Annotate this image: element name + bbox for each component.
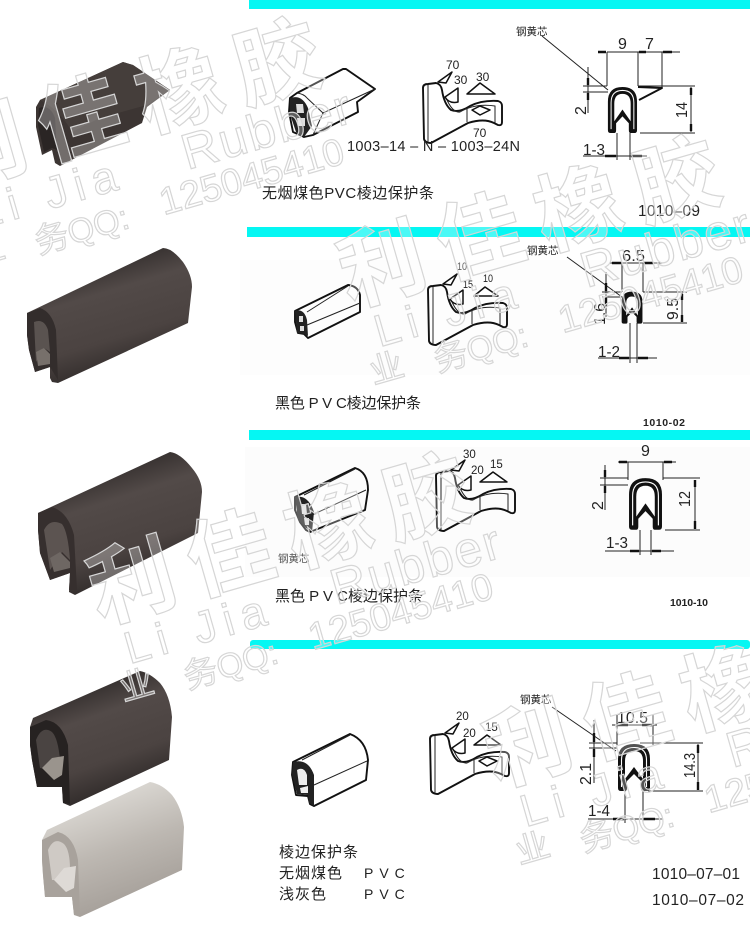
icon: angled section drawing 2: 15: [463, 279, 473, 291]
watermark 2: 利佳橡胶: [328, 120, 746, 324]
product names 4: 浅灰色: [279, 886, 327, 903]
watermark 3: 利佳橡胶: [78, 437, 496, 641]
icon: angled section drawing 1: 70: [446, 58, 460, 72]
cross-section drawing 1010-07: [552, 707, 703, 823]
panel 1: smoke-free charcoal PVC trim: [262, 25, 700, 220]
product photo 1: dark flanged edge trim: [36, 62, 170, 166]
icon: angled section drawing 2: 10: [483, 273, 493, 285]
watermark 3: 125045410: [304, 566, 498, 659]
icon: angled section drawing 2: 10: [457, 261, 467, 273]
cross-section drawing 1010-07: 1-4: [588, 803, 610, 820]
icon: angled section drawing 2: [428, 261, 507, 345]
cyan bar 2: [247, 227, 750, 237]
part numbers 1010-07: [652, 866, 744, 909]
icon: profile sketch 1: [289, 69, 375, 137]
icon: angled section drawing 4: [430, 711, 509, 794]
product names 4: 无烟煤色: [279, 865, 343, 882]
product names 4: 棱边保护条: [279, 844, 359, 861]
watermark 3: Rubber: [324, 513, 508, 615]
cross-section drawing 1010-09: 1-3: [583, 142, 605, 159]
product name 1: 无烟煤色PVC棱边保护条: [262, 185, 434, 202]
cross-section drawing 1010-10: 9: [641, 443, 650, 460]
panel 2: black PVC trim: [275, 244, 687, 429]
watermark 3: [78, 436, 519, 715]
panel 4: charcoal and light grey PVC trim: [279, 693, 744, 909]
icon: angled section drawing 4: 20: [463, 728, 476, 740]
product names 4: [279, 844, 411, 903]
icon: profile sketch 4: [292, 734, 368, 806]
product photo 4b: light grey edge trim: [42, 782, 184, 917]
cross-section drawing 1010-10: 12: [677, 491, 694, 507]
watermark 2: 业: [365, 346, 408, 392]
product name 3: 黑色 P V C棱边保护条: [275, 588, 423, 605]
cross-section drawing 1010-02: 1.6: [592, 303, 609, 325]
cyan bar 4: [250, 640, 750, 649]
watermark 2: 125045410: [554, 249, 748, 342]
icon: angled section drawing 3: 15: [490, 459, 503, 471]
cross-section drawing 1010-09: [542, 36, 695, 160]
label: steel core 2: 钢黄芯: [527, 244, 558, 257]
faint drawing backdrop 3: [245, 447, 750, 577]
cross-section drawing 1010-09: 7: [645, 36, 654, 53]
cross-section drawing 1010-02: 1-2: [598, 344, 620, 361]
cross-section drawing 1010-10: [590, 443, 700, 555]
icon: angled section drawing 4: 20: [456, 711, 469, 723]
part numbers 1010-07: 1010–07–01: [652, 866, 740, 883]
icon: angled section drawing 1: [423, 58, 502, 143]
icon: profile sketch 2: [295, 285, 360, 338]
cyan bar 1: [249, 0, 750, 9]
watermark 4: 务QQ:: [575, 797, 678, 860]
watermark 2: 务QQ:: [429, 317, 532, 380]
watermark 4: 业: [511, 826, 554, 872]
product names 4: PVC: [364, 886, 411, 902]
cross-section drawing 1010-09: 2: [573, 106, 590, 115]
cyan bar 3: [249, 430, 750, 440]
icon: angled section drawing 1: 30: [454, 73, 468, 87]
cross-section drawing 1010-10: 2: [590, 501, 607, 510]
cross-section drawing 1010-02: 6.5: [622, 248, 645, 265]
watermark 3: 业: [115, 663, 158, 709]
label: steel core 3: 钢黄芯: [278, 552, 310, 565]
icon: angled section drawing 3: [436, 449, 515, 531]
label: steel core 1: 钢黄芯: [516, 25, 548, 38]
icon: angled section drawing 1: 30: [476, 70, 490, 84]
cross-section drawing 1010-09: 9: [618, 36, 627, 53]
product names 4: PVC: [364, 865, 411, 881]
watermark 2: Li Jia: [368, 266, 529, 357]
watermark 1: 125045410: [155, 131, 349, 224]
watermark 1: [0, 1, 370, 280]
faint drawing backdrop 2: [240, 260, 750, 375]
part numbers 1010-07: 1010–07–02: [652, 892, 744, 909]
panel 3: black PVC trim with steel core: [275, 443, 708, 609]
icon: angled section drawing 3: 30: [463, 449, 476, 461]
cross-section drawing 1010-07: 2.1: [578, 763, 595, 785]
watermark 1: Rubber: [175, 78, 359, 180]
watermark 3: Li Jia: [118, 583, 279, 674]
part numbers 1003: 1003–14 – N – 1003–24N: [347, 139, 520, 155]
product photo 3: black PVC edge trim: [38, 452, 202, 595]
cross-section drawing 1010-07: 14.3: [682, 753, 699, 778]
part number 1010-09: 1010–09: [638, 203, 700, 220]
icon: profile sketch 3: [295, 468, 368, 532]
part number 1010-10: 1010-10: [670, 597, 708, 609]
icon: angled section drawing 4: 15: [485, 722, 498, 734]
product photo 2: black PVC edge trim: [27, 248, 192, 383]
watermark 4: Li Jia: [514, 746, 675, 837]
watermark 1: 务QQ:: [30, 199, 133, 262]
cross-section drawing 1010-10: 1-3: [606, 535, 628, 552]
product name 2: 黑色 P V C棱边保护条: [275, 395, 421, 412]
cross-section drawing 1010-02: 9.5: [665, 298, 682, 320]
icon: angled section drawing 3: 20: [471, 465, 484, 477]
icon: angled section drawing 1: 70: [473, 126, 487, 140]
part number 1010-02: 1010-02: [643, 417, 685, 429]
product photo 4a: dark edge trim: [30, 671, 172, 806]
cross-section drawing 1010-02: [567, 248, 687, 363]
label: steel core 4: 钢黄芯: [520, 693, 552, 706]
cross-section drawing 1010-07: 10.5: [617, 710, 648, 727]
cross-section drawing 1010-09: 14: [674, 102, 691, 118]
watermark 3: 务QQ:: [179, 634, 282, 697]
